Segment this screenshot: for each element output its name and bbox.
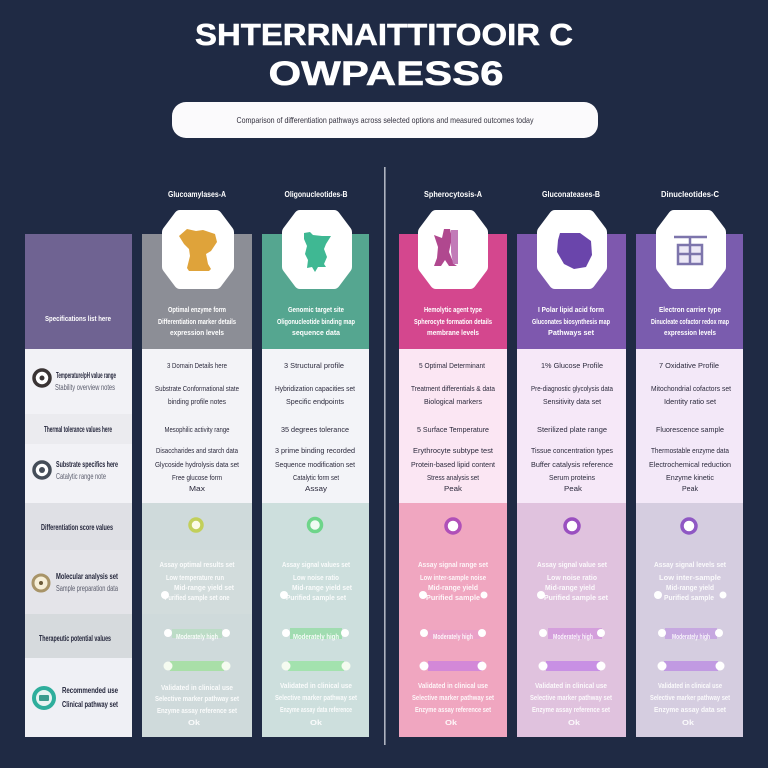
badge: amber icon [168,216,228,283]
panel: column 4 purple: Validated in clinical use [535,681,607,690]
panel: column 3 pink: membrane levels [427,328,479,337]
panel: column 4 purple: 1% Glucose Profile [541,361,603,370]
panel: row labels: Stability overview notes [55,383,115,392]
panel: column 1 grey: Substrate Conformational state [155,384,239,393]
panel: column 1 grey: Ok [188,718,201,727]
badge: violet icon [543,216,601,283]
panel: column 5 violet: Validated in clinical use [658,681,722,690]
panel: column 3 pink: Stress analysis set [427,473,480,482]
panel: column 1 grey: 3 Domain Details here [167,361,227,370]
panel: column 3 pink: Peak [444,484,462,493]
pill: mid bar: Moderately high [553,632,593,641]
panel: column 4 purple [517,216,626,737]
panel: column 4 purple: Peak [564,484,582,493]
icon: violet ring [682,519,696,533]
panel: row labels: Substrate specifics here [56,460,118,469]
panel: column 3 pink: Erythrocyte subtype test [413,446,494,455]
panel: column 5 violet: 7 Oxidative Profile [659,361,719,370]
panel: column 2 teal: Catalytic form set [293,473,340,482]
pill: high bar [658,661,724,671]
pill: high bar [164,661,230,671]
panel: column 3 pink: Mid-range yield [428,583,478,592]
panel: column 1 grey: Enzyme assay reference set [157,706,237,715]
panel: column 1 grey: Mesophilic activity range [164,425,230,434]
panel: column 4 purple: Buffer catalysis reference [531,460,613,469]
panel: column 4 purple: Purified sample set [544,593,608,602]
column headings: Dinucleotides-C [661,190,719,199]
panel: column 3 pink: Low inter-sample noise [420,573,486,582]
panel: row labels: Clinical pathway set [62,700,118,709]
pill: mid bar [282,628,349,641]
panel: column 5 violet: Enzyme assay data set [654,705,726,714]
panel: column 1 grey: Selective marker pathway set [155,694,239,703]
icon: green dot [308,518,322,532]
panel: row labels: Recommended use [62,686,118,695]
panel: column 2 teal: Purified sample set [286,593,346,602]
panel: column 5 violet: Purified sample [664,593,714,602]
panel: row labels: Therapeutic potential values [39,634,111,643]
panel: column 3 pink: Assay signal range set [418,560,488,569]
column headings: Glucoamylases-A [168,190,226,199]
icon: lime dot [190,519,202,531]
panel: row labels [25,234,132,737]
panel: column 2 teal: Mid-range yield set [292,583,352,592]
icon: teal badge [34,688,54,708]
panel: column 5 violet: Mitochondrial cofactors set [651,384,732,393]
icon: dark ring [34,370,50,386]
panel: column 5 violet: expression levels [664,328,716,337]
title: OWPAESS6 [268,55,504,93]
panel: column 2 teal: sequence data [292,328,341,337]
panel: column 1 grey: Optimal enzyme form [168,305,226,314]
badge: magenta icon [424,216,482,283]
panel: column 5 violet: Low inter-sample [659,573,721,582]
panel: column 2 teal: Enzyme assay data reference [280,705,352,714]
panel: column 2 teal: Sequence modification set [275,460,356,469]
panel: column 1 grey: Mid-range yield set [174,583,234,592]
pill: mid bar [539,628,605,641]
panel: column 1 grey: Validated in clinical use [161,683,233,692]
column headings [168,190,719,199]
panel: row labels: Differentiation score values [41,523,113,532]
panel: column 2 teal: Genomic target site [288,305,344,314]
subtitle pill [172,102,598,138]
panel: column 2 teal: Specific endpoints [286,397,344,406]
icon: violet ring [565,519,579,533]
panel: column 4 purple: Ok [568,718,581,727]
pill: mid bar [658,628,723,641]
title [195,17,573,93]
panel: column 2 teal [262,216,369,737]
panel: column 1 grey: binding profile notes [168,397,226,406]
pill: mid bar: Moderately high [176,632,218,641]
panel: column 3 pink: Hemolytic agent type [424,305,482,314]
panel: column 3 pink: Biological markers [424,397,482,406]
badge: green icon [288,216,346,283]
panel: column 2 teal: Hybridization capacities set [275,384,356,393]
panel: column 5 violet: Fluorescence sample [656,425,724,434]
panel: column 4 purple: Sensitivity data set [543,397,602,406]
panel: column 3 pink: Selective marker pathway set [412,693,494,702]
panel: column 1 grey: Assay optimal results set [160,560,235,569]
panel: column 2 teal: Validated in clinical use [280,681,352,690]
panel: row labels: Molecular analysis set [56,572,118,581]
pill: high bar [282,661,350,671]
pill: high bar [538,661,606,671]
panel: column 5 violet: Ok [682,718,695,727]
panel: column 5 violet: Electron carrier type [659,305,721,314]
panel: column 3 pink: Ok [445,718,458,727]
panel: column 2 teal: Ok [310,718,323,727]
panel: row labels: Sample preparation data [56,584,118,593]
panel: column 5 violet [636,216,743,737]
pill: mid bar [164,629,230,641]
icon: gold ring [33,575,49,591]
panel: row labels: Catalytic range note [56,472,106,481]
panel: column 2 teal: Oligonucleotide binding map [277,317,355,326]
panel: column 1 grey: Disaccharides and starch data [156,446,239,455]
column headings: Spherocytosis-A [424,190,482,199]
panel: row labels: Thermal tolerance values here [44,425,112,434]
panel: column 2 teal: 3 prime binding recorded [275,446,355,455]
panel: column 3 pink: Enzyme assay reference set [415,705,491,714]
panel: column 1 grey: Free glucose form [172,473,222,482]
panel: column 3 pink: Purified sample [426,593,480,602]
panel: row labels: Specifications list here [45,314,111,323]
center divider [384,167,386,745]
panel: column 4 purple: Enzyme assay reference set [532,705,610,714]
panel: column 3 pink: Validated in clinical use [418,681,488,690]
panel: column 4 purple: Low noise ratio [547,573,597,582]
icon: violet ring [446,519,460,533]
panel: column 3 pink: Spherocyte formation details [414,317,492,326]
panel: column 4 purple: Gluconates biosynthesis map [532,317,610,326]
panel: column 2 teal: 35 degrees tolerance [281,425,349,434]
panel: column 1 grey: Glycoside hydrolysis data set [155,460,240,469]
panel: column 5 violet: Mid-range yield [666,583,714,592]
panel: column 5 violet: Selective marker pathway set [650,693,730,702]
panel: column 3 pink: 5 Optimal Determinant [419,361,486,370]
panel: column 1 grey: Max [189,484,205,493]
panel: column 5 violet: Electrochemical reduction [649,460,731,469]
title: SHTERRNAITTITOOIR C [195,17,573,52]
panel: column 3 pink: Protein-based lipid content [411,460,496,469]
panel: column 4 purple: Pathways set [548,328,594,337]
panel: column 3 pink: 5 Surface Temperature [417,425,489,434]
pill: mid bar: Moderately high [672,632,710,641]
panel: column 1 grey: Low temperature run [166,573,224,582]
panel: column 2 teal: Assay [305,484,327,493]
panel: column 5 violet: Peak [682,484,698,493]
panel: column 1 grey [142,216,252,737]
panel: column 4 purple: Pre-diagnostic glycolysis data [531,384,614,393]
panel: column 5 violet: Thermostable enzyme data [651,446,730,455]
pill: mid bar: Moderately high [293,632,339,641]
column headings: Gluconateases-B [542,190,600,199]
panel: column 5 violet: Enzyme kinetic [666,473,714,482]
panel: column 4 purple: Selective marker pathway set [530,693,612,702]
panel: column 3 pink: Treatment differentials & data [411,384,496,393]
panel: column 1 grey: Differentiation marker details [158,317,236,326]
pill: mid bar: Moderately high [433,632,473,641]
column headings: Oligonucleotides-B [284,190,348,199]
panel: column 3 pink [399,216,507,737]
panel: column 5 violet: Dinucleate cofactor redox map [651,317,729,326]
panel: column 2 teal: Low noise ratio [293,573,339,582]
badge: grid icon [662,216,720,283]
pill: high bar [420,661,486,671]
panel: column 1 grey: expression levels [170,328,224,337]
panel: column 4 purple: Serum proteins [549,473,595,482]
panel: column 2 teal: 3 Structural profile [284,361,344,370]
icon: slate ring [34,462,50,478]
panel: column 5 violet: Identity ratio set [664,397,717,406]
subtitle pill: Comparison of differentiation pathways across selected options and measured outcomes today [236,115,534,125]
panel: column 1 grey: Purified sample set one [164,593,230,602]
panel: column 2 teal: Assay signal values set [282,560,350,569]
panel: column 4 purple: Mid-range yield [545,583,595,592]
pill: mid bar [420,629,486,641]
panel: column 2 teal: Selective marker pathway set [275,693,357,702]
panel: column 4 purple: Tissue concentration types [531,446,613,455]
panel: column 4 purple: Sterilized plate range [537,425,607,434]
panel: column 4 purple: Assay signal value set [537,560,607,569]
panel: column 5 violet: Assay signal levels set [654,560,726,569]
panel: column 4 purple: I Polar lipid acid form [538,305,604,314]
panel: row labels: Temperature/pH value range [56,371,116,380]
